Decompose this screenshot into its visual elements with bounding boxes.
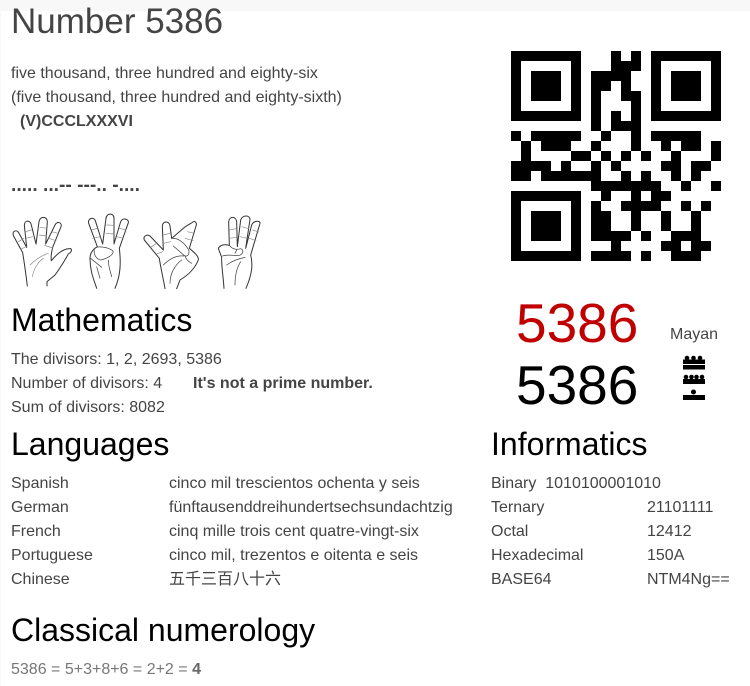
language table: 五千三百八十六 [169, 571, 281, 588]
language table: French [11, 523, 61, 540]
informatics table: 150A [647, 547, 684, 564]
hand: four [218, 216, 260, 288]
language table [11, 475, 453, 588]
informatics table: NTM4Ng== [647, 571, 730, 588]
numerology sum: 5386 = 5+3+8+6 = 2+2 = 4 [11, 661, 201, 678]
heading: Informatics: Informatics [491, 426, 647, 462]
divisors: The divisors: 1, 2, 2693, 5386 [11, 351, 222, 368]
black number: 5386 [516, 354, 638, 416]
title: Number 5386 [11, 2, 223, 41]
red number: 5386 [516, 292, 638, 354]
hand: five [13, 217, 71, 286]
informatics table: 21101111 [647, 499, 713, 516]
heading: Classical numerology: Classical numerology [11, 612, 315, 648]
QR code [511, 51, 721, 261]
informatics table: Octal [491, 523, 528, 540]
language table: Spanish [11, 475, 69, 492]
informatics table: BASE64 [491, 571, 551, 588]
hand: eight [88, 214, 128, 288]
sum of divisors: Sum of divisors: 8082 [11, 399, 165, 416]
language table: cinco mil, trezentos e oitenta e seis [169, 547, 418, 564]
icon: hand signs [12, 214, 260, 290]
informatics table [491, 475, 730, 588]
number of divisors: Number of divisors: 4 [11, 375, 162, 392]
language table: German [11, 499, 69, 516]
language table: cinq mille trois cent quatre-vingt-six [169, 523, 419, 540]
ordinal in words: (five thousand, three hundred and eighty-sixth) [11, 89, 342, 106]
morse code: ..... ...-- ---.. -.... [11, 175, 140, 196]
informatics table: 12412 [647, 523, 692, 540]
Mayan label: Mayan [670, 326, 718, 343]
language table: Portuguese [11, 547, 93, 564]
heading: Mathematics: Mathematics [11, 302, 192, 338]
language table: cinco mil trescientos ochenta y seis [169, 475, 420, 492]
language table: Chinese [11, 571, 70, 588]
informatics table: Binary 1010100001010 [491, 475, 661, 492]
icon: Mayan numeral [683, 356, 705, 400]
roman numeral: (V)CCCLXXXVI [20, 113, 133, 130]
informatics table: Ternary [491, 499, 544, 516]
hand: three [144, 222, 198, 289]
prime status: It's not a prime number. [193, 375, 373, 392]
informatics table: Hexadecimal [491, 547, 583, 564]
language table: fünftausenddreihundertsechsundachtzig [169, 499, 453, 516]
heading: Languages: Languages [11, 426, 169, 462]
number in words: five thousand, three hundred and eighty-six [11, 65, 318, 82]
